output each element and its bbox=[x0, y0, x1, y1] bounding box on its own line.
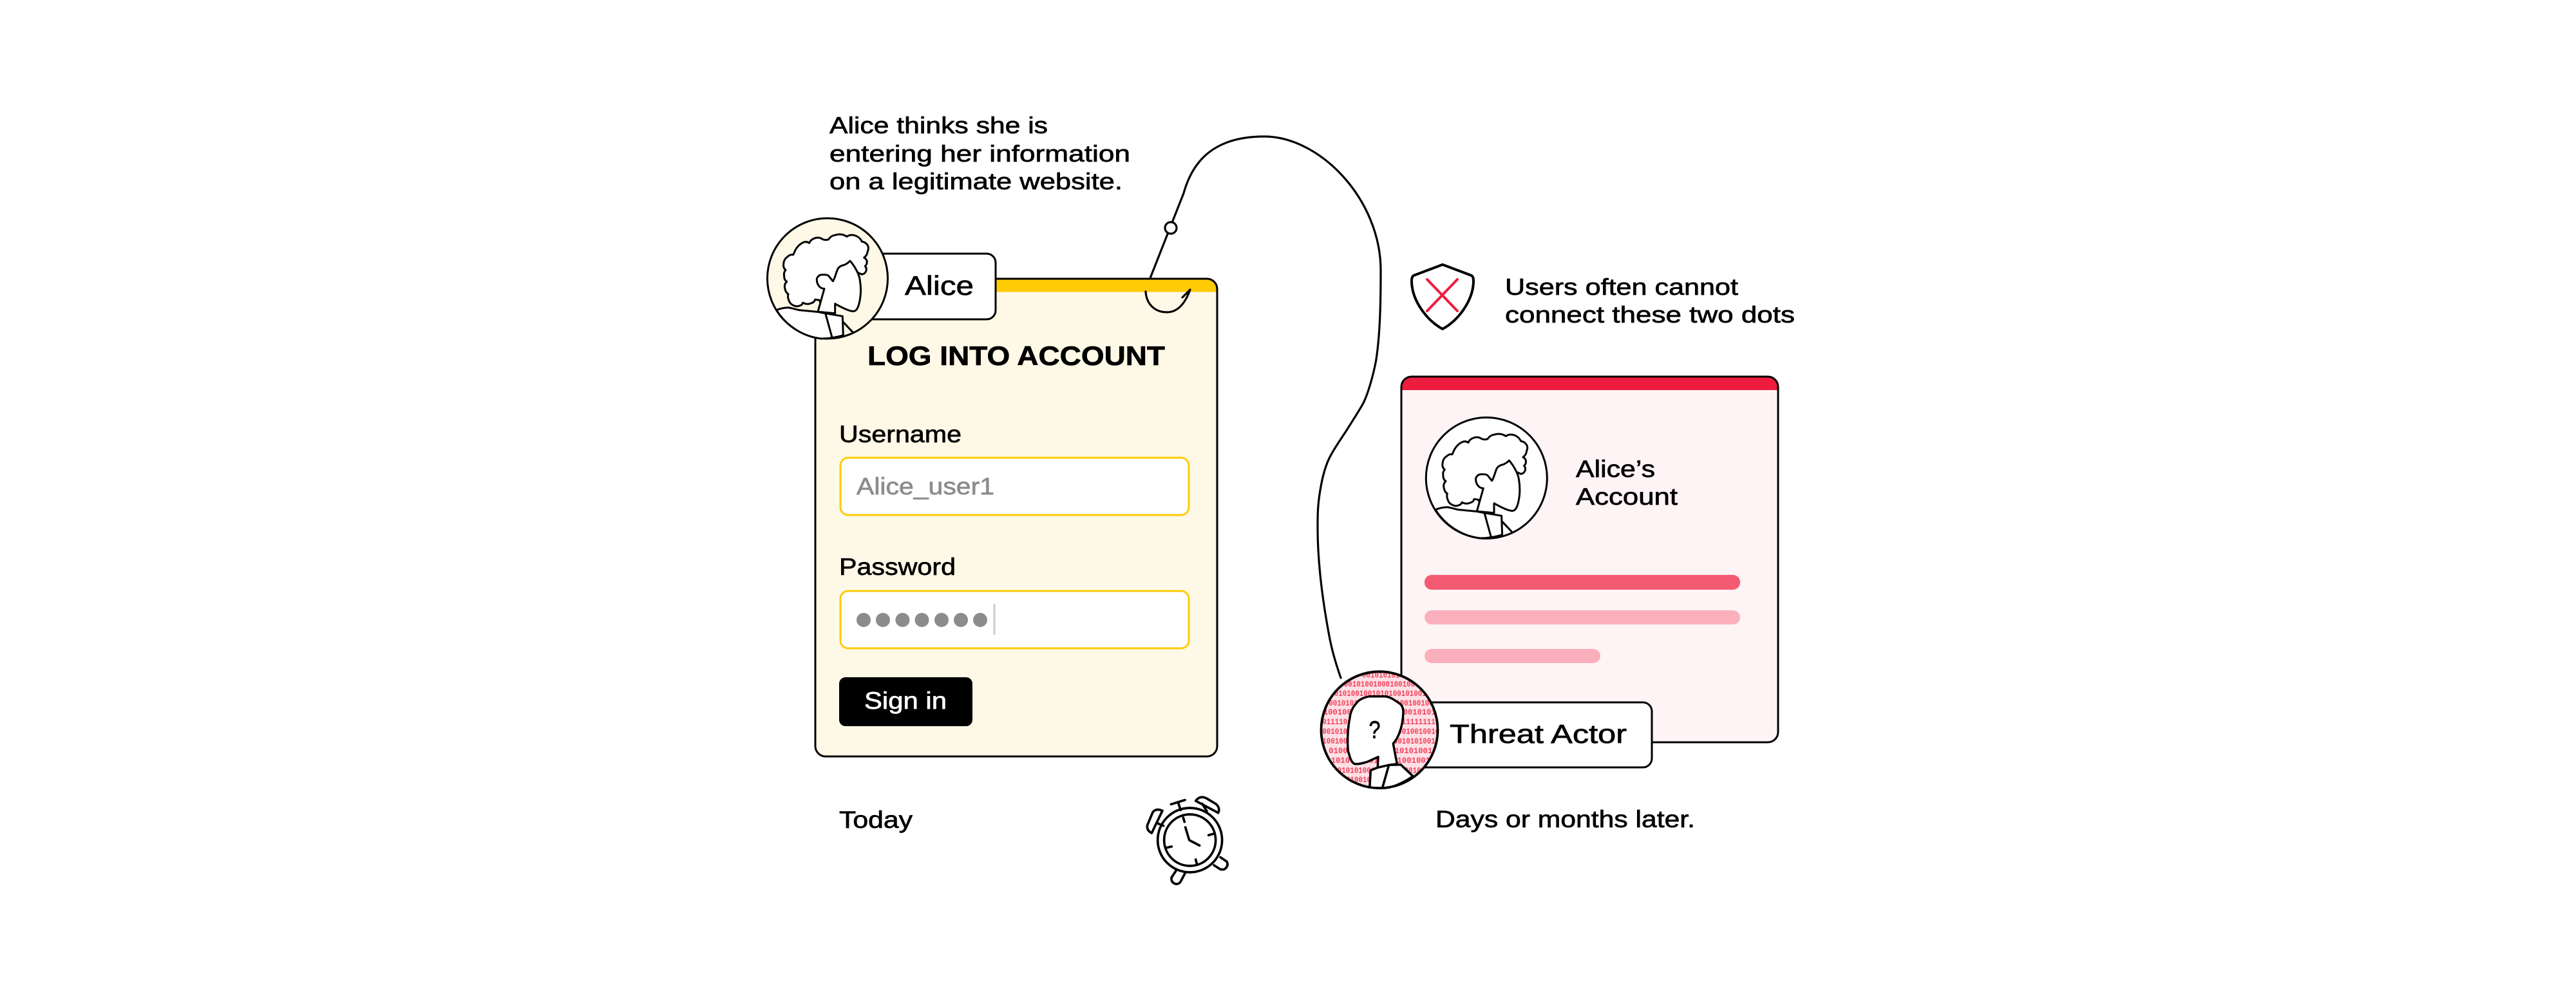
avatar: threat actor bbox=[1321, 671, 1444, 789]
sign in button: Sign in bbox=[864, 688, 947, 714]
account name bbox=[1576, 456, 1678, 510]
binary pattern bbox=[1322, 671, 1444, 785]
binary pattern: 10010010010100101001010100100 bbox=[1322, 737, 1444, 746]
tag: Threat Actor bbox=[1410, 702, 1652, 767]
red top band bbox=[1401, 377, 1778, 390]
password dots and caret bbox=[857, 604, 996, 635]
card top band bbox=[997, 279, 1216, 292]
phishing hook and line bbox=[1146, 136, 1381, 678]
account avatar bbox=[1426, 417, 1547, 538]
panel: Alice's account card bbox=[1401, 377, 1778, 742]
caption: Alice thinks: Alice thinks she is bbox=[829, 112, 1048, 138]
password input bbox=[840, 591, 1189, 648]
account name: Alice’s bbox=[1576, 456, 1655, 482]
username value: Alice_user1 bbox=[857, 473, 994, 500]
binary pattern: 00101010100101011001001001 bbox=[1329, 699, 1437, 708]
icon: alarm clock bbox=[1147, 797, 1227, 884]
binary pattern: 1001001010010010100101011 bbox=[1323, 708, 1441, 717]
binary pattern: 010100100101010010100100 bbox=[1334, 689, 1435, 698]
label: days or months later: Days or months later. bbox=[1435, 806, 1695, 832]
binary pattern: 00101001010010110100100100100 bbox=[1322, 727, 1444, 736]
silhouette bbox=[1348, 697, 1413, 789]
binary pattern: 010010101001010 bbox=[1346, 776, 1409, 785]
caption: Alice thinks bbox=[829, 112, 1130, 194]
question mark: ? bbox=[1369, 717, 1381, 744]
shield icon bbox=[1412, 265, 1473, 329]
caption: users cannot connect: Users often cannot bbox=[1505, 274, 1738, 300]
swivel ring bbox=[1165, 222, 1177, 234]
label: Today: Today bbox=[839, 807, 913, 833]
account name: Account bbox=[1576, 483, 1678, 510]
binary pattern: 010011010010101010100110 bbox=[1329, 747, 1442, 756]
tag: Threat Actor: Threat Actor bbox=[1450, 719, 1627, 749]
binary pattern: 001010010001001000101 bbox=[1344, 680, 1432, 689]
password label: Password bbox=[839, 554, 956, 580]
caption: Alice thinks: entering her information bbox=[829, 140, 1130, 167]
caption: users cannot connect bbox=[1505, 274, 1795, 328]
card heading: LOG INTO ACCOUNT bbox=[867, 341, 1165, 371]
caption: Alice thinks: on a legitimate website. bbox=[829, 168, 1122, 194]
content bars bbox=[1425, 575, 1740, 663]
username label: Username bbox=[839, 421, 961, 447]
sign in button bbox=[839, 677, 972, 726]
binary pattern: 0101010010100101001010 bbox=[1338, 766, 1430, 775]
tag: Alice: Alice bbox=[905, 270, 974, 301]
caption: users cannot connect: connect these two dots bbox=[1505, 301, 1795, 328]
binary pattern: 10100101010010100100101 bbox=[1331, 756, 1440, 765]
tag: Alice bbox=[863, 254, 996, 319]
avatar: Alice bbox=[768, 218, 887, 339]
username input bbox=[840, 458, 1189, 515]
binary pattern: 01111010100101111111111111111 bbox=[1322, 718, 1444, 727]
binary pattern: 001010101001010 bbox=[1362, 671, 1425, 680]
panel: fake login card bbox=[815, 279, 1217, 756]
